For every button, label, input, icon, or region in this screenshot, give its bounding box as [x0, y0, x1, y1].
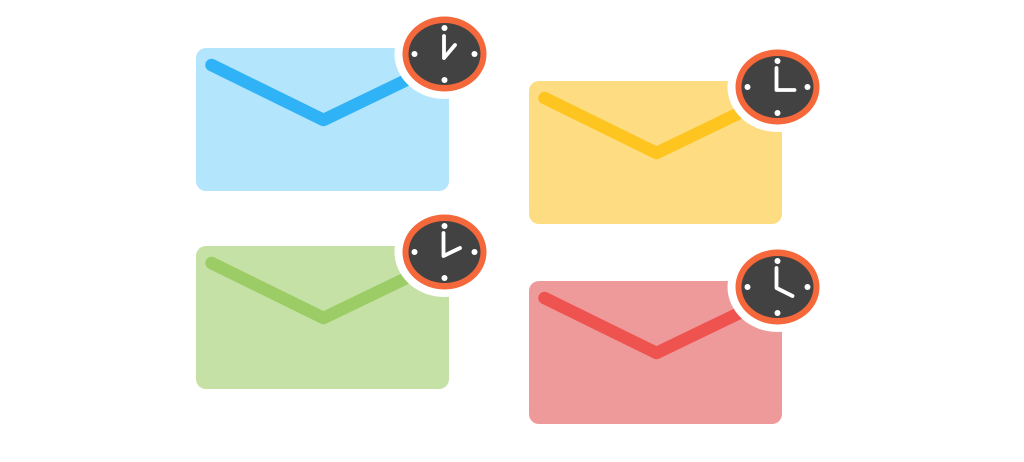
clock: [394, 207, 494, 297]
envelope: green, two o'clock: [196, 207, 494, 389]
envelope body: [196, 246, 449, 389]
envelope flap: [544, 298, 754, 353]
clock: [728, 242, 828, 332]
envelope body: [529, 81, 782, 224]
envelope: yellow, three o'clock: [529, 42, 828, 224]
envelope: red, four o'clock: [529, 242, 828, 424]
envelope: blue, one o'clock: [196, 9, 494, 191]
envelope body: [529, 281, 782, 424]
envelope flap: [212, 65, 421, 120]
envelope flap: [212, 263, 421, 318]
clock: [728, 42, 828, 132]
envelope flap: [544, 98, 754, 153]
clock: [394, 9, 494, 99]
envelope body: [196, 48, 449, 191]
